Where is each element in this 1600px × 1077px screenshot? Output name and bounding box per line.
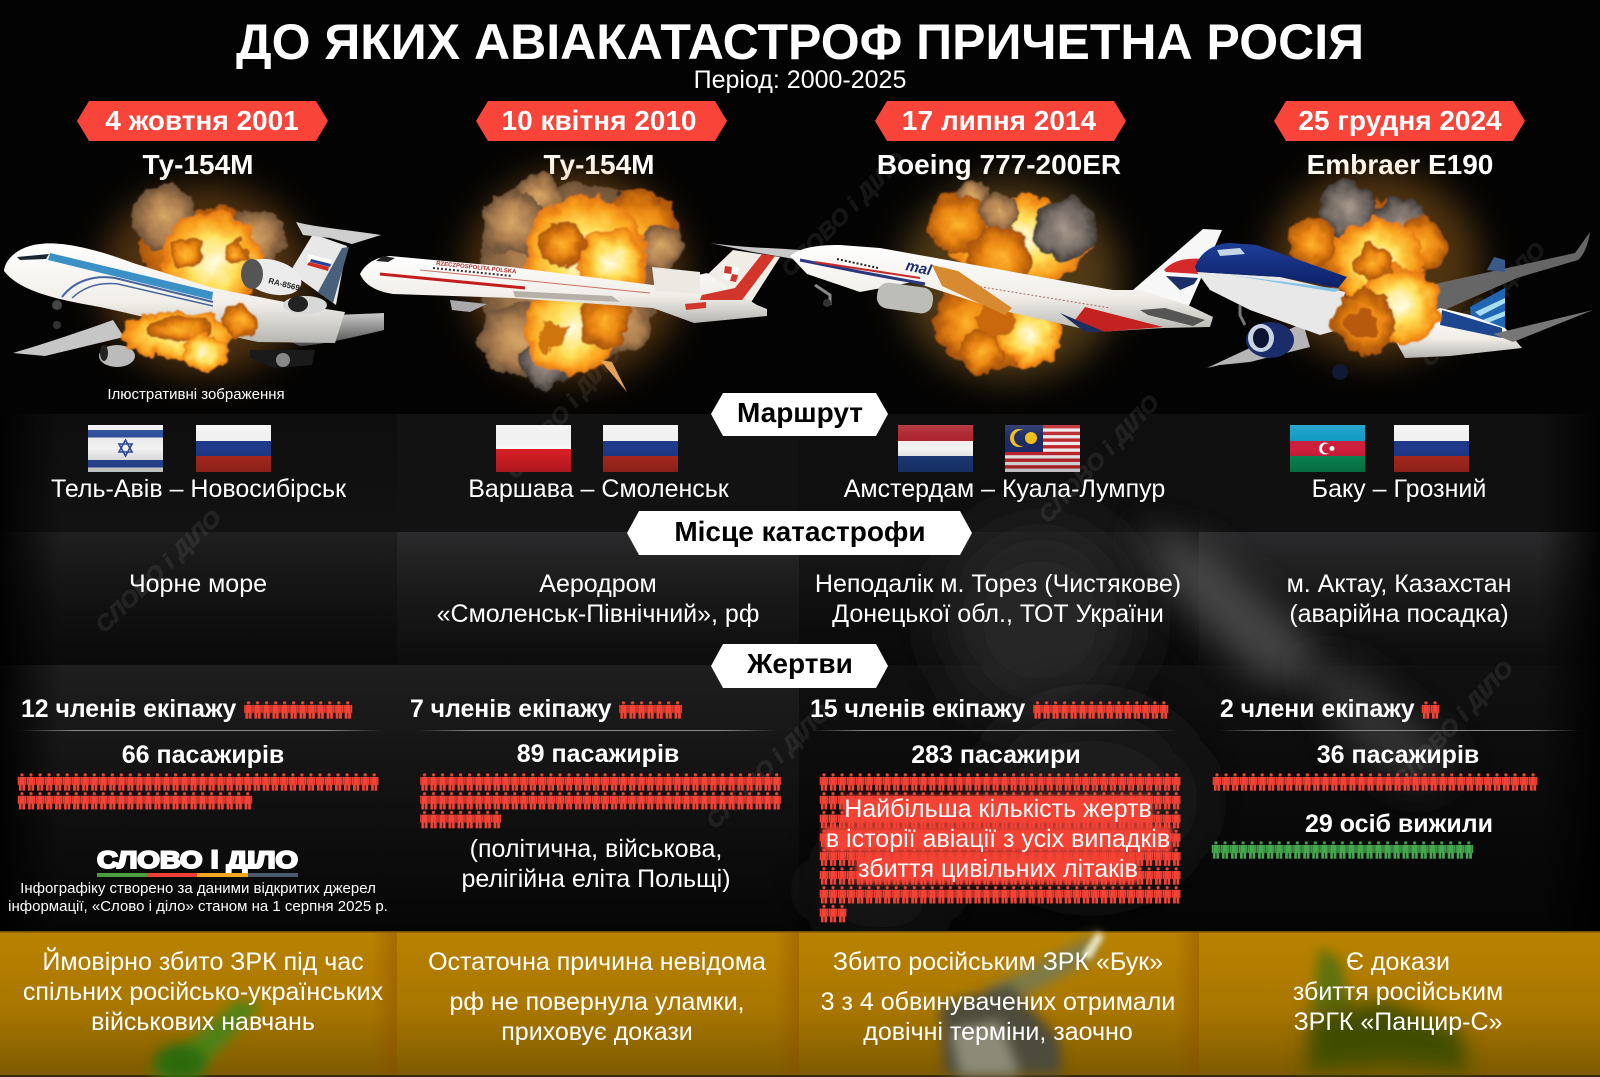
flag: Poland: [496, 425, 571, 472]
conclusion 4: ЗРГК «Панцир-С»: [1294, 1008, 1502, 1036]
column 4 date badge: [1274, 101, 1525, 141]
illustration: Tu-154M RA-85693 with explosion: RA-85693: [268, 276, 306, 294]
illustration: Tu-154M RA-85693 with explosion: [4, 184, 384, 375]
survivors pictogram: [1212, 841, 1473, 859]
conclusion 3: довічні терміни, заочно: [863, 1018, 1133, 1046]
victims column 3: [810, 696, 1181, 923]
watermarks: СЛОВО і ДІЛО: [776, 147, 910, 282]
route text 3: Амстердам – Куала-Лумпур: [844, 475, 1165, 503]
flag: Russia: [196, 425, 271, 472]
missile launcher silhouettes: [150, 932, 1470, 1077]
crew count 2: 7 членів екіпажу: [410, 696, 612, 723]
subtitle: period: Період: 2000-2025: [694, 66, 906, 94]
callout: largest death toll: Найбільша кількість жертв: [844, 795, 1152, 823]
watermarks: [90, 147, 1550, 834]
crew pictogram 3: [1033, 701, 1168, 719]
illustration: Tu-154M Polish Air Force with explosion: [360, 170, 800, 392]
section label: crash site: [627, 511, 972, 555]
conclusion 4: збиття російським: [1293, 978, 1503, 1006]
flag: Russia: [1394, 425, 1469, 472]
conclusion 3: Збито російським ЗРК «Бук»: [833, 948, 1163, 976]
crash site 4: м. Актау, Казахстан: [1287, 570, 1511, 598]
passenger count 1: 66 пасажирів: [122, 741, 284, 769]
section label: route: Маршрут: [737, 397, 863, 428]
illustration: Boeing 777-200ER Malaysia Airlines with explosion: mal: [904, 257, 934, 279]
watermarks: СЛОВО і ДІЛО: [90, 505, 226, 638]
flag: Netherlands: [898, 425, 973, 472]
conclusion 4: [1293, 948, 1503, 1036]
crash site 4: [1287, 570, 1511, 628]
crash site 3: Донецької обл., ТОТ України: [832, 600, 1164, 628]
column 1 date badge: 4 жовтня 2001: [105, 105, 299, 136]
section label: victims: Жертви: [746, 648, 853, 679]
conclusion 2: приховує докази: [501, 1018, 693, 1046]
crew count 1: 12 членів екіпажу: [21, 696, 237, 723]
illustration: Tu-154M Polish Air Force with explosion: RZECZPOSPOLITA POLSKA: [436, 261, 517, 275]
crash site 4: (аварійна посадка): [1289, 600, 1509, 628]
watermarks: СЛОВО і ДІЛО: [1033, 390, 1164, 527]
column 1 date badge: [77, 101, 328, 141]
flag: Israel: [88, 425, 163, 472]
victims column 4: [1212, 696, 1580, 859]
caption: illustrative images: Ілюстративні зображення: [107, 386, 285, 403]
aircraft model 4: Embraer E190: [1307, 149, 1493, 180]
logo: Slovo i Dilo: СЛОВО і ДІЛО: [97, 847, 298, 874]
callout: largest death toll: [823, 795, 1172, 883]
watermarks: СЛОВО і ДІЛО: [701, 699, 835, 834]
conclusion 1: [23, 946, 384, 1036]
background panels: [0, 414, 1600, 931]
crew pictogram 1: [244, 701, 352, 719]
flag: Malaysia: [1005, 425, 1080, 472]
conclusion 1: військових навчань: [91, 1008, 315, 1036]
route text 1: Тель-Авів – Новосибірськ: [51, 475, 347, 503]
column 3 date badge: [875, 101, 1126, 141]
section label: crash site: Місце катастрофи: [674, 516, 926, 547]
column 2 date badge: 10 квітня 2010: [502, 105, 696, 136]
crash site 1: Чорне море: [129, 570, 267, 598]
title: ДО ЯКИХ АВІАКАТАСТРОФ ПРИЧЕТНА РОСІЯ: [236, 14, 1364, 70]
passenger count 3: 283 пасажири: [911, 741, 1081, 769]
victims column 2: [410, 696, 781, 893]
callout: largest death toll: в історії авіації з усіх випадків: [826, 825, 1170, 853]
crash site 3: [815, 570, 1181, 628]
crew count 3: 15 членів екіпажу: [810, 696, 1026, 723]
source note: інформації, «Слово і діло» станом на 1 серпня 2025 р.: [8, 898, 388, 915]
conclusion 4: Є докази: [1346, 948, 1450, 976]
victims column 1: [18, 696, 383, 810]
watermarks: СЛОВО і ДІЛО: [1416, 237, 1550, 372]
conclusion 1: спільних російсько-українських: [23, 978, 384, 1006]
watermarks: СЛОВО і ДІЛО: [501, 341, 626, 483]
aircraft model 1: Ту-154М: [143, 149, 253, 180]
passenger pictogram 4: [1212, 773, 1538, 791]
note: elite of Poland: (політична, військова,: [470, 835, 722, 863]
passenger pictogram 1: [18, 773, 379, 810]
aircraft model 3: Boeing 777-200ER: [877, 149, 1121, 180]
background smoke: [810, 520, 1460, 930]
source note: [8, 880, 388, 915]
crash site 2: Аеродром: [539, 570, 657, 598]
source note: Інфографіку створено за даними відкритих джерел: [20, 880, 376, 897]
flag: Azerbaijan: [1290, 425, 1365, 472]
note: elite of Poland: релігійна еліта Польщі): [461, 865, 731, 893]
crew pictogram 4: [1422, 701, 1440, 719]
passenger pictogram 2: [420, 773, 781, 829]
column 3 date badge: 17 липня 2014: [902, 105, 1097, 136]
crash site 2: [437, 570, 759, 628]
survivors count: 29 осіб вижили: [1305, 810, 1493, 838]
route text 4: Баку – Грозний: [1312, 475, 1486, 503]
conclusion 3: [821, 948, 1175, 1046]
illustration: Embraer E190 Azerbaijan Airlines with explosion: [1195, 170, 1593, 380]
passenger pictogram 3: [820, 773, 1181, 923]
crash site 3: Неподалік м. Торез (Чистякове): [815, 570, 1181, 598]
passenger count 4: 36 пасажирів: [1317, 741, 1479, 769]
conclusion 2: [428, 948, 766, 1046]
column 2 date badge: [476, 101, 727, 141]
route text 2: Варшава – Смоленськ: [468, 475, 730, 503]
passenger count 2: 89 пасажирів: [517, 740, 679, 768]
section label: victims: [711, 644, 888, 688]
conclusion 3: 3 з 4 обвинувачених отримали: [821, 988, 1175, 1016]
section label: route: [711, 393, 888, 436]
crash site 2: «Смоленськ-Північний», рф: [437, 600, 759, 628]
conclusion 2: Остаточна причина невідома: [428, 948, 766, 976]
crew pictogram 2: [619, 701, 682, 719]
bottom band: conclusions: [0, 931, 1600, 1077]
column 4 date badge: 25 грудня 2024: [1298, 105, 1502, 136]
illustration: Boeing 777-200ER Malaysia Airlines with explosion: [790, 179, 1222, 380]
note: elite of Poland: [461, 835, 731, 893]
crew count 4: 2 члени екіпажу: [1220, 696, 1415, 723]
aircraft model 2: Ту-154М: [544, 149, 654, 180]
conclusion 2: рф не повернула уламки,: [450, 988, 744, 1016]
callout: largest death toll: збиття цивільних літаків: [858, 855, 1138, 883]
flag: Russia: [603, 425, 678, 472]
watermarks: СЛОВО і ДІЛО: [1387, 656, 1518, 793]
conclusion 1: Ймовірно збито ЗРК під час: [42, 946, 364, 976]
